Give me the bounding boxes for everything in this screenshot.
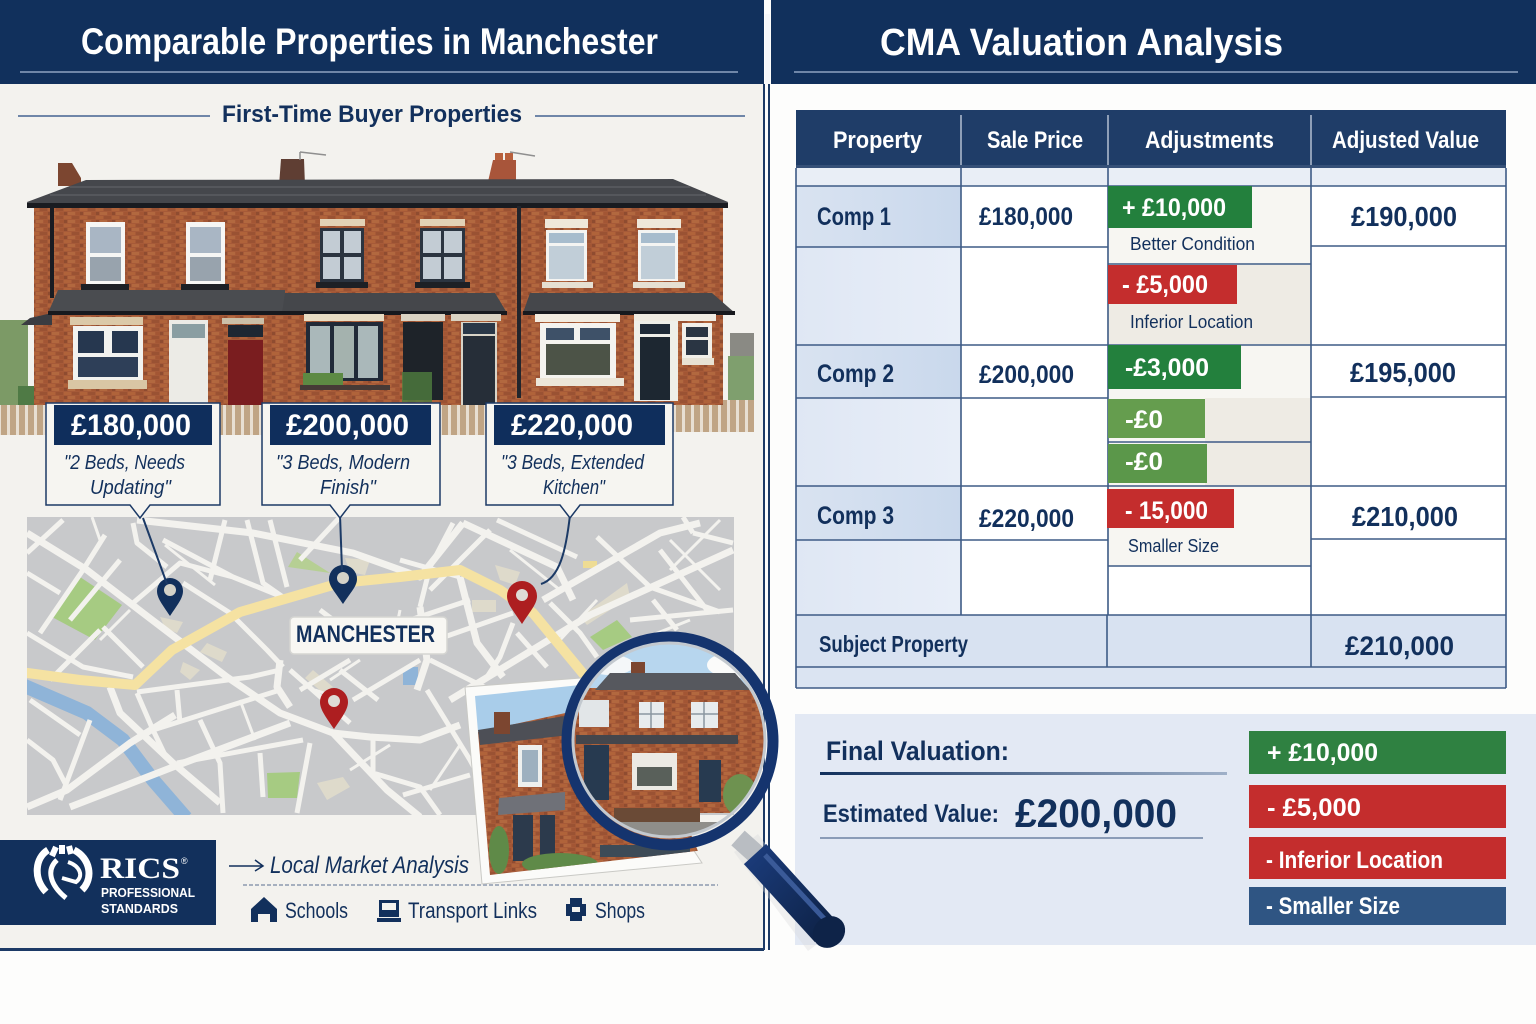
row: comp 1: £190,000 [1351, 201, 1457, 232]
map: Manchester [20, 517, 734, 818]
background foliage [0, 320, 754, 406]
adjustment: inferior location [1108, 265, 1253, 332]
row: comp 3: Comp 3 [817, 502, 894, 530]
amenity: shops: Shops [595, 898, 645, 923]
adjustment: zero one [1108, 399, 1205, 438]
adjustment: better condition: + £10,000 [1122, 194, 1226, 222]
amenity: schools: Schools [285, 898, 348, 923]
panel: comparable properties [0, 0, 770, 951]
row: comp 2: Comp 2 [817, 360, 894, 388]
estimated value: £200,000 [1015, 792, 1177, 836]
estimated value [820, 792, 1203, 839]
bar: smaller size [1249, 887, 1506, 925]
ground floor windows [68, 314, 714, 390]
adjustment: smaller size: Smaller Size [1128, 536, 1219, 556]
logo: RICS professional standards: PROFESSIONAL [101, 885, 195, 900]
icon: magnifying glass [567, 637, 852, 955]
row: comp 3 [817, 501, 1458, 533]
table header: Sale Price [987, 127, 1083, 154]
panel: CMA valuation [771, 0, 1536, 945]
amenity: schools [251, 897, 348, 923]
left header band [0, 0, 764, 84]
adjustment: inferior location: Inferior Location [1130, 312, 1253, 332]
card: comp 2 price [262, 403, 440, 518]
bar: minus 5,000 [1249, 785, 1506, 828]
table header: Property [833, 127, 923, 154]
fence [0, 400, 754, 435]
pin: subject property [320, 688, 348, 729]
estimated value: Estimated Value: [823, 800, 999, 828]
panel: final valuation [795, 714, 1536, 945]
row: subject property: £210,000 [1345, 631, 1454, 661]
row: comp 2: £200,000 [979, 361, 1074, 389]
logo: RICS professional standards: RICS [100, 852, 180, 885]
row: comp 2: £195,000 [1350, 357, 1456, 388]
local market analysis heading: Local Market Analysis [270, 852, 469, 879]
card: comp 1 price: Updating" [90, 477, 172, 499]
logo: RICS professional standards: ® [181, 856, 188, 866]
icon: lion emblem [37, 845, 89, 898]
bar: inferior location [1249, 837, 1506, 879]
row: comp 1 [817, 201, 1457, 232]
adjustment: smaller size [1107, 489, 1234, 556]
table grid [796, 168, 1506, 688]
illustration: terraced houses [0, 152, 754, 435]
bar: plus 10,000 [1249, 731, 1506, 774]
adjustment: smaller size: - 15,000 [1125, 497, 1208, 525]
row: comp 1: Comp 1 [817, 203, 891, 231]
upper windows [81, 219, 685, 290]
photo: subject property [465, 678, 710, 884]
right header band [771, 0, 1536, 84]
row: comp 3: £210,000 [1352, 501, 1458, 532]
map: main road [20, 570, 590, 685]
table header: Adjustments [1145, 127, 1274, 154]
amenity: shops [566, 898, 645, 923]
map: building blocks [160, 558, 630, 800]
title: CMA valuation analysis: CMA Valuation Analysis [880, 22, 1283, 64]
pin: comp 1 [157, 578, 183, 616]
lens rim [567, 637, 773, 845]
map: streets [27, 517, 733, 817]
lens house view [576, 644, 764, 836]
bar: plus 10,000: + £10,000 [1267, 739, 1378, 767]
connector lines [143, 515, 570, 584]
white divider in header [765, 14, 770, 84]
card: comp 3 price: £220,000 [511, 409, 633, 442]
adjustment: better condition: Better Condition [1130, 234, 1255, 254]
row: comp 1: £180,000 [979, 203, 1073, 231]
icon: transport [377, 900, 401, 922]
final valuation heading: Final Valuation: [826, 736, 1009, 766]
table header: Adjusted Value [1332, 127, 1479, 154]
row: subject property [819, 631, 1454, 661]
icon: school [251, 897, 277, 922]
table header [796, 110, 1506, 168]
adjustment: zero two [1108, 444, 1207, 483]
bar: minus 5,000: - £5,000 [1267, 794, 1361, 822]
card: comp 2 price: £200,000 [286, 409, 409, 442]
front doors [169, 314, 716, 405]
card: comp 1 price [46, 403, 220, 518]
porch roofs [21, 290, 735, 325]
card: comp 2 price: Finish" [320, 477, 377, 499]
roof [27, 179, 728, 206]
row: subject property: Subject Property [819, 631, 968, 657]
logo: RICS professional standards: STANDARDS [101, 901, 178, 916]
label: Manchester: MANCHESTER [296, 621, 435, 648]
pin: comp 3 [507, 581, 537, 624]
icon: shop [566, 898, 586, 921]
pin: comp 2 [329, 565, 357, 604]
sub-heading: first-time buyer properties: First-Time Buyer Properties [222, 101, 522, 128]
arrow [229, 860, 263, 871]
row: comp 2 [817, 357, 1456, 389]
adjustment: zero one: -£0 [1125, 406, 1163, 434]
table body fills [796, 110, 1506, 688]
logo: RICS professional standards [0, 840, 216, 925]
adjustment: minus 3,000 [1108, 345, 1241, 389]
card: comp 1 price: £180,000 [71, 409, 191, 442]
adjustment: zero two: -£0 [1125, 448, 1163, 476]
map: parks [52, 552, 632, 798]
bar: smaller size: - Smaller Size [1266, 893, 1400, 920]
card: comp 3 price: "3 Beds, Extended [501, 452, 645, 474]
final valuation heading [820, 736, 1227, 775]
drainpipes [50, 206, 521, 398]
bar: inferior location: - Inferior Location [1266, 847, 1443, 874]
label: Manchester [290, 617, 447, 654]
table: CMA comparison [796, 110, 1506, 688]
card: comp 1 price: "2 Beds, Needs [64, 452, 185, 474]
card: comp 3 price: Kitchen" [543, 477, 606, 499]
map: river [20, 684, 186, 818]
adjustment: minus 3,000: -£3,000 [1125, 354, 1209, 382]
handle [738, 838, 852, 955]
chimneys [58, 152, 535, 186]
card: comp 2 price: "3 Beds, Modern [276, 452, 410, 474]
card: comp 3 price [486, 403, 673, 518]
adjustment: inferior location: - £5,000 [1122, 271, 1208, 299]
row: comp 3: £220,000 [979, 505, 1074, 533]
brick walls [34, 208, 723, 405]
adjustment: better condition [1108, 186, 1255, 254]
amenity: transport links: Transport Links [408, 898, 537, 923]
title: comparable properties: Comparable Properties in Manchester [81, 21, 658, 62]
